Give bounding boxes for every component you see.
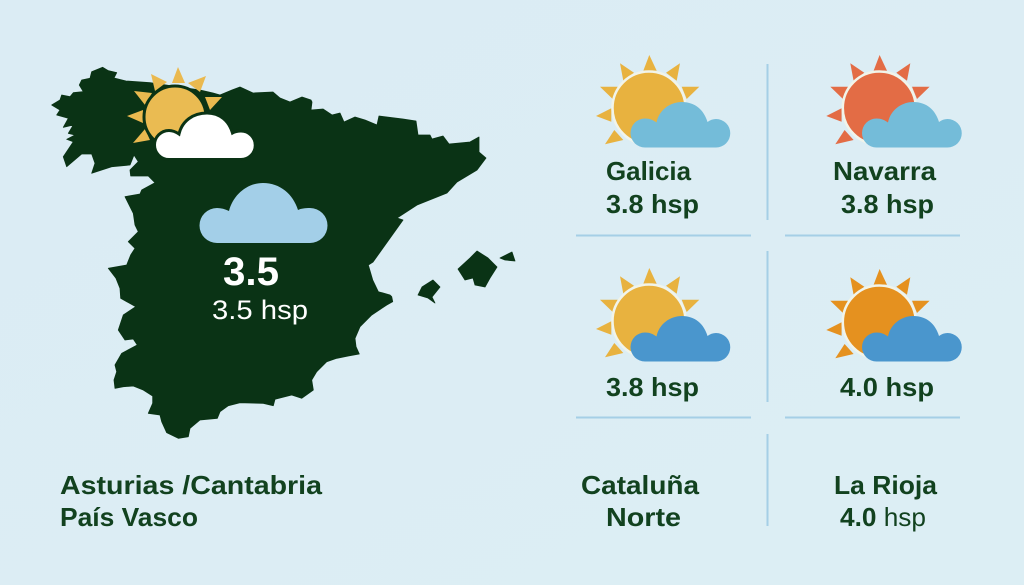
- island: Mallorca: [458, 251, 497, 287]
- island: Ibiza: [418, 280, 440, 303]
- label: La Rioja: [834, 470, 938, 532]
- label: La Rioja: La Rioja: [834, 470, 938, 500]
- panel: Navarra: [826, 55, 962, 219]
- icon: map blue cloud: [200, 183, 328, 243]
- panel: Navarra: 3.8 hsp: [841, 189, 934, 219]
- map value: 3.5: [223, 250, 279, 294]
- label: Cataluña Norte: Norte: [606, 502, 681, 532]
- label: La Rioja: 4.0 hsp: [840, 502, 926, 532]
- panel: La Rioja icon and value: [826, 269, 962, 402]
- island: Menorca: [500, 252, 515, 261]
- icon: map sun with white cloud: [127, 67, 255, 160]
- left region labels: Asturias /Cantabria: [60, 470, 323, 500]
- left region labels: País Vasco: [60, 502, 198, 532]
- panel: Galicia: 3.8 hsp: [606, 189, 699, 219]
- label: Cataluña Norte: [581, 470, 700, 532]
- map label: 3.5 hsp: [212, 295, 308, 325]
- panel: Cataluña icon and value: [596, 268, 730, 402]
- panel: Cataluña icon and value: 3.8 hsp: [606, 372, 699, 402]
- panel: Galicia: [596, 55, 730, 219]
- map of Spain: [52, 67, 515, 438]
- label: Cataluña Norte: Cataluña: [581, 470, 700, 500]
- panel: La Rioja icon and value: 4.0 hsp: [840, 372, 934, 402]
- panel: Galicia: Galicia: [606, 156, 692, 186]
- left region labels: [60, 470, 323, 532]
- panel: Navarra: Navarra: [833, 156, 937, 186]
